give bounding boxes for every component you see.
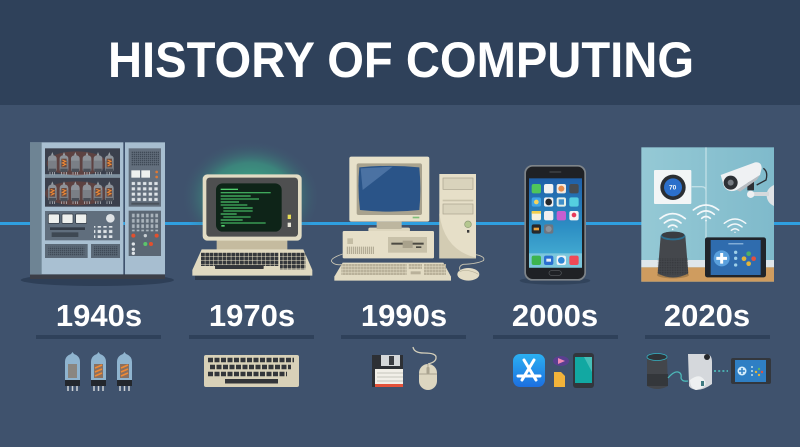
illustration: 1990s desktop PC — [331, 157, 484, 281]
decade label: 2020s — [645, 298, 770, 339]
icon: vacuum tubes — [65, 352, 132, 391]
security camera — [721, 162, 774, 206]
decade label: 1940s: 1940s — [56, 298, 142, 333]
title band — [0, 0, 800, 105]
decade label: 1970s — [189, 298, 314, 339]
icon: keyboard — [204, 355, 299, 387]
tablet — [705, 237, 766, 277]
icon: security camera device — [688, 354, 712, 390]
illustration: 1940s vacuum tube computer — [21, 142, 174, 286]
illustration: 2020s smart home — [641, 147, 774, 282]
icon: media and file — [553, 356, 569, 387]
icon: smart speaker — [647, 354, 668, 389]
decade label: 2000s: 2000s — [512, 298, 598, 333]
title: HISTORY OF COMPUTING — [108, 32, 694, 88]
icon: connector cable — [668, 372, 688, 381]
icon: tablet — [731, 358, 771, 384]
decade label: 2020s: 2020s — [664, 298, 750, 333]
icon: connection dots — [714, 370, 728, 372]
icon: mouse — [413, 347, 437, 390]
decade label: 1970s: 1970s — [209, 298, 295, 333]
decade label: 2000s — [493, 298, 618, 339]
illustration: 1970s terminal — [181, 140, 321, 280]
timeline line — [0, 222, 800, 225]
thermostat: 70 — [669, 185, 677, 192]
illustration: 2000s smartphone — [520, 165, 590, 285]
icon: app store — [513, 354, 545, 387]
decade label: 1940s — [36, 298, 161, 339]
decade label: 1990s: 1990s — [361, 298, 447, 333]
icon: floppy disk — [372, 355, 403, 387]
decade label: 1990s — [341, 298, 466, 339]
smart speaker — [657, 232, 689, 278]
icon: small smartphone — [573, 353, 594, 388]
app icons — [532, 184, 579, 265]
